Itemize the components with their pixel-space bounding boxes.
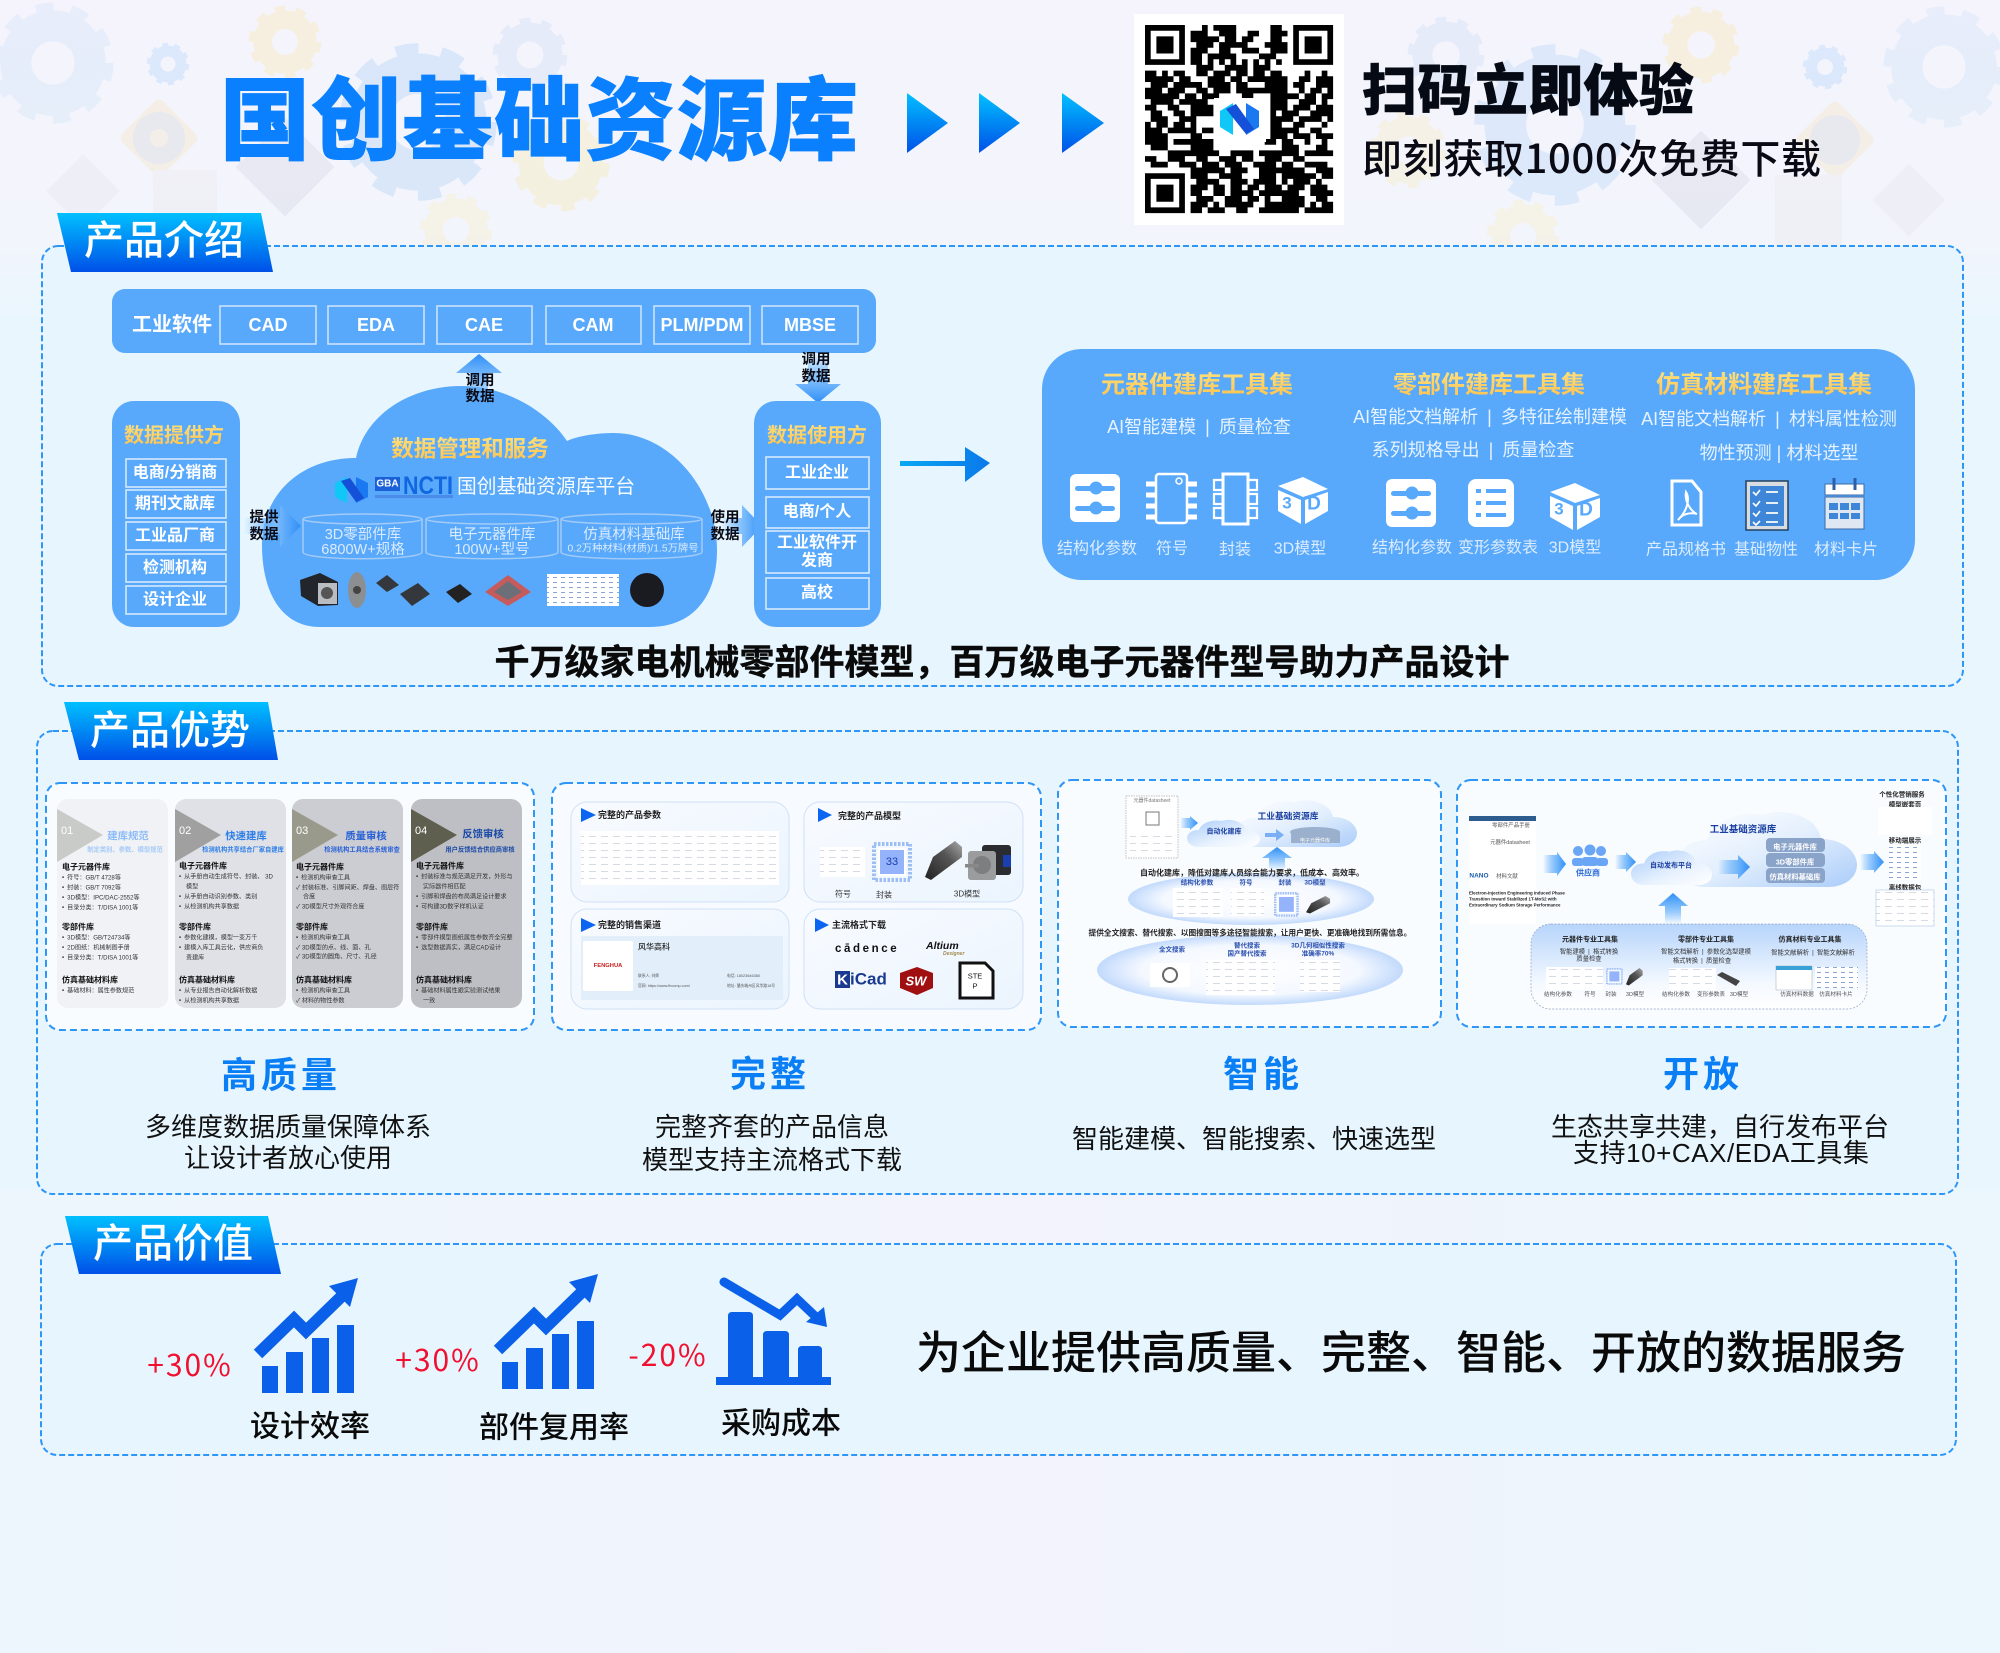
toolkit: parts: 零部件建库工具集 (1393, 372, 1585, 398)
card 02: fast library building: 快速建库 (225, 830, 267, 842)
cloud: data management and services: 数据管理和服务 (391, 436, 549, 462)
card 04: feedback review: 电子元器件库 (416, 860, 464, 870)
label: suppliers: 供应商 (1576, 868, 1600, 878)
source documents (1469, 816, 1565, 924)
cloud: industrial base library (1678, 812, 1857, 887)
source documents: 元器件datasheet (1490, 838, 1530, 846)
arrow: call data down (795, 351, 841, 403)
ellipse: search: 替代搜索 (1234, 940, 1260, 950)
advantage: complete: 模型支持主流格式下载 (642, 1145, 902, 1175)
card 01: library standards: 仿真基础材料库 (62, 974, 118, 984)
icon: structured parameters (1386, 479, 1436, 527)
toolkit: components: 封装 (1219, 540, 1251, 558)
card: mainstream format downloads: STE (968, 972, 982, 980)
value statement: 为企业提供高质量、完整、智能、开放的数据服务 (916, 1328, 1906, 1378)
sub-panel: intelligent diagram (1058, 780, 1441, 1027)
toolkits box: 元器件专业工具集 (1562, 934, 1618, 944)
card: mainstream format downloads: SW (906, 974, 928, 988)
icon: 3D cube: D (1579, 500, 1593, 520)
icon: falling chart (716, 1282, 831, 1385)
card: sales channels: 电话: 18023646380 (727, 973, 760, 978)
cloud: auto publishing platform (1631, 850, 1712, 885)
arrow: call data down: 数据 (802, 367, 830, 385)
card: mainstream format downloads: cādence (835, 943, 899, 955)
card 03: quality review: 零部件库 (296, 922, 328, 932)
panel: product advantages (37, 702, 1958, 1194)
toolkit: parts: 系列规格导出 | 质量检查 (1372, 440, 1574, 460)
icon: variant table (1468, 479, 1514, 527)
card 01: library standards: • 封装：GB/T 7092等 (62, 884, 121, 892)
advantage: complete: 完整 (730, 1054, 810, 1094)
QR sub heading: 即刻获取1000次免费下载 (1362, 127, 1821, 185)
sub-panel: open ecosystem diagram (1457, 780, 1946, 1027)
bar: industrial software: PLM/PDM (660, 315, 744, 335)
panel: product value (41, 1216, 1956, 1455)
arrow: provide data: 数据 (250, 525, 278, 543)
card 02: fast library building: • 从手册自动生成符号、封装、 3D (179, 872, 273, 880)
cloud: automated library building: 自动化建库 (1206, 826, 1242, 836)
toolkit: components: 3D模型 (1274, 540, 1326, 558)
arrow: cloud to outputs (1860, 851, 1884, 873)
toolkit: components: 结构化参数 (1057, 540, 1137, 558)
arrows: title to QR (907, 93, 1104, 153)
cloud: industrial base library (1237, 800, 1357, 847)
bar: industrial software: CAM (572, 315, 614, 335)
icon: PDF spec (1672, 481, 1701, 525)
metric: design efficiency: 设计效率 (250, 1410, 370, 1444)
card 01: library standards (57, 799, 168, 1008)
panel: data users: 发商 (801, 550, 833, 570)
toolkit: simulation materials: 产品规格书 (1646, 540, 1726, 558)
panel: data users: 数据使用方 (767, 423, 867, 447)
toolkits box: 结构化参数 (1662, 990, 1690, 998)
card 01: library standards: • 3D模型：GB/T24734等 (62, 934, 131, 942)
advantage: high quality: 让设计者放心使用 (184, 1143, 392, 1173)
card: product parameters (571, 802, 789, 902)
logo: N mark (335, 477, 368, 503)
toolkit: parts: AI智能文档解析 | 多特征绘制建模 (1353, 407, 1627, 427)
panel: data providers: 期刊文献库 (135, 494, 215, 512)
advantage: complete: 完整齐套的产品信息 (655, 1112, 889, 1142)
sub-panel: completeness cards (552, 783, 1041, 1030)
card 01: library standards: • 目录分类：T/DISA 1001等 (62, 904, 138, 912)
advantage: complete (642, 1054, 902, 1175)
ellipse: search: 全文搜索 (1159, 944, 1186, 954)
panel: data providers: 数据提供方 (124, 423, 224, 447)
card 04: feedback review: • 选型数据真实，满足CAD设计 (416, 944, 501, 952)
bar: industrial software: 工业软件 (132, 313, 212, 336)
heading tab: 产品优势: 产品优势 (90, 709, 250, 753)
card 02: fast library building: • 从手册自动识别参数、类别 (179, 892, 257, 900)
toolkit: simulation materials: 仿真材料建库工具集 (1656, 372, 1872, 398)
source documents: Electron-Injection Engineering Induced Phase (1469, 890, 1565, 896)
advantage: open: 开放 (1663, 1054, 1743, 1094)
metric: purchasing cost (628, 1282, 841, 1440)
panel: data providers: 工业品厂商 (135, 526, 215, 544)
logo: GBA NCTI: NCTI (403, 472, 453, 500)
metric: purchasing cost: 采购成本 (721, 1408, 841, 1440)
icon: 3D cube: D (1307, 494, 1321, 514)
icon: checklist (1746, 481, 1788, 530)
card 01: library standards: 建库规范 (107, 830, 149, 842)
toolkit: components: AI智能建模 | 质量检查 (1107, 417, 1291, 437)
database: parts library (303, 514, 422, 559)
decorative gears and parts, left (0, 9, 604, 262)
icon: N logo (1220, 103, 1259, 135)
toolkits box: 格式转换 | 质量检查 (1673, 956, 1732, 964)
toolkit: components: 符号 (1156, 540, 1188, 558)
advantage: open (1551, 1054, 1889, 1168)
toolkit: parts: 3D模型 (1549, 538, 1601, 556)
icon: 3D cube (1550, 483, 1600, 530)
icon: 3D cube (1278, 477, 1328, 524)
database stack: 仿真材料基础库 (1769, 872, 1821, 882)
source documents: Transition toward Stabilized 1T-MoS2 with (1469, 896, 1557, 902)
card 03: quality review: 检测机构工具结合系统审查 (324, 844, 400, 854)
card: mainstream format downloads: K (837, 972, 848, 988)
title: 国创基础资源库 (220, 72, 858, 172)
card 01: library standards: • 目录分类：T/DISA 1001等 (62, 954, 138, 962)
database: parts library: 3D零部件库 (325, 526, 401, 543)
arrow: to automated library (1180, 816, 1198, 830)
card 03: quality review: 仿真基础材料库 (296, 974, 352, 984)
panel: data providers: 电商/分销商 (133, 464, 217, 482)
card: mainstream format downloads: Designer (943, 951, 965, 957)
card 03: quality review: • 检测机构审查工具 (296, 986, 350, 994)
card 02: fast library building: • 参数化建模，模型一变万千 (179, 934, 257, 942)
advantage: intelligent (1072, 1054, 1436, 1154)
card 01: library standards: 零部件库 (62, 922, 94, 932)
card 03: quality review: 合度 (303, 892, 315, 900)
toolkit: parts: 结构化参数 (1372, 538, 1452, 556)
card 04: feedback review: • 引脚和焊盘的布局满足设计要求 (416, 892, 506, 900)
card 02: fast library building: 模型 (186, 882, 198, 890)
icon: symbol (1146, 474, 1197, 523)
card 04: feedback review (411, 799, 522, 1008)
ellipse: structured data (1128, 873, 1374, 925)
panel: data users (754, 401, 881, 627)
panel: data providers (112, 401, 240, 627)
toolkits box: 零部件专业工具集 (1678, 934, 1734, 944)
card 04: feedback review: 反馈审核 (462, 828, 504, 840)
arrow: docs to supplier (1543, 852, 1566, 876)
panel: data providers: 检测机构 (143, 558, 207, 576)
panel: data providers: 设计企业 (143, 590, 207, 608)
arrow: provide data (244, 505, 301, 547)
toolkit: components: 元器件建库工具集 (1101, 372, 1293, 398)
heading tab: 产品价值 (65, 1216, 281, 1274)
toolkits box: 3D模型 (1730, 990, 1749, 998)
arrow: supplier to platform (1615, 852, 1636, 872)
card 04: feedback review: 用户反馈结合供应商审核 (445, 844, 515, 854)
source documents: 材料文献 (1496, 872, 1518, 880)
datasheet document (1126, 796, 1178, 858)
icon: structured parameters (1070, 474, 1120, 522)
card 02: fast library building: 责建库 (186, 954, 204, 962)
QR heading: 扫码立即体验 (1362, 60, 1694, 122)
arrow: call data up (456, 354, 502, 405)
card: mainstream format downloads: P (972, 982, 978, 990)
logo: GBA NCTI (375, 472, 453, 500)
bar: industrial software (112, 289, 876, 353)
icon: package (1214, 474, 1257, 524)
QR code (1134, 14, 1344, 225)
card 02: fast library building: 仿真基础材料库 (179, 974, 235, 984)
toolkits box: 封装 (1605, 990, 1617, 998)
metric: part reuse rate: 部件复用率 (479, 1412, 629, 1444)
outputs column: 个性化营销服务 (1879, 790, 1925, 798)
card: sales channels: 风华高科 (638, 942, 670, 952)
card 01: library standards: 电子元器件库 (62, 862, 110, 872)
card: sales channels: 联系人: 刘辉 (638, 973, 659, 978)
cloud: data management and services (262, 386, 717, 627)
cloud: auto publishing platform: 自动发布平台 (1650, 860, 1692, 870)
card 01: library standards: • 符号：GB/T 4728等 (62, 874, 121, 882)
toolkit: simulation materials: 材料卡片 (1814, 540, 1878, 558)
database: electronic components library: 电子元器件库 (448, 526, 536, 543)
cloud: industrial base library: 电子元器件库 (1300, 837, 1330, 844)
arrow: use data: 使用 (710, 508, 740, 526)
toolkits box: 变形参数表 (1697, 990, 1725, 998)
ellipse: structured data: 3D模型 (1304, 878, 1326, 886)
icon: 3D cube: 3 (1554, 500, 1564, 518)
arrow: provide data: 提供 (250, 509, 279, 526)
card: product models: 3D模型 (954, 888, 980, 898)
metric: design efficiency (147, 1278, 370, 1444)
card 03: quality review: ✓ 3D模型尺寸外观符合度 (296, 902, 364, 910)
toolkit: simulation materials: AI智能文档解析 | 材料属性检测 (1641, 409, 1897, 429)
heading tab: 产品介绍 (57, 213, 273, 272)
panel: product introduction (42, 213, 1963, 686)
bar: industrial software: CAE (465, 315, 503, 335)
source documents: 零部件产品手册 (1492, 821, 1530, 829)
toolkit: parts: 变形参数表 (1458, 538, 1538, 556)
database: electronic components library: 100W+型号 (454, 541, 530, 558)
ellipse: search: 3D几何相似性搜索 (1291, 940, 1345, 950)
caption: automated library building: 自动化建库，降低对建库人员综合能力要求，低成本、高效率。 (1140, 868, 1364, 878)
card: product models: 封装 (876, 890, 892, 900)
card: sales channels: 地址: 肇庆端州区风华路18号 (727, 983, 775, 988)
outputs column: 移动端展示 (1889, 836, 1922, 844)
database stack (1766, 838, 1825, 883)
card 01: library standards: • 基础材料：属性参数规范 (62, 986, 134, 994)
arrow: toolkits to platform (1658, 893, 1688, 924)
card 04: feedback review: • 基础材料属性跟实验测试结果 (416, 986, 500, 994)
heading tab: 产品价值: 产品价值 (93, 1222, 253, 1266)
card: sales channels: 完整的销售渠道 (598, 919, 661, 930)
card 03: quality review: • 检测机构审查工具 (296, 934, 350, 942)
panel: data users: 工业企业 (785, 462, 849, 482)
database stack: 电子元器件库 (1773, 842, 1817, 852)
toolkit: simulation materials: 基础物性 (1734, 540, 1798, 558)
database: simulation materials library: 仿真材料基础库 (583, 525, 685, 543)
toolkit: components (1057, 372, 1328, 558)
source documents: NANO (1469, 872, 1489, 880)
section caption: 千万级家电机械零部件模型，百万级电子元器件型号助力产品设计 (494, 644, 1510, 682)
card: product models: 33 (886, 856, 898, 868)
card 03: quality review: ✓ 材料的物性参数 (296, 996, 345, 1004)
card: product models: 符号 (835, 888, 851, 898)
cloud: industrial base library: 工业基础资源库 (1258, 810, 1319, 821)
database: simulation materials library (561, 514, 702, 559)
advantage: high quality (145, 1054, 431, 1173)
sub-panel: high quality process cards (46, 783, 534, 1030)
caption: search: 提供全文搜索、替代搜索、以图搜图等多途径智能搜索，让用户更快、更准确地找到所需信息。 (1089, 928, 1411, 938)
card 02: fast library building: • 从检测机构共享数据 (179, 902, 239, 910)
panel: data users: 高校 (801, 582, 833, 602)
card 02: fast library building: 02 (179, 825, 191, 837)
arrow: use data: 数据 (710, 525, 740, 543)
card 04: feedback review: 零部件库 (416, 922, 448, 932)
card 04: feedback review: • 可构建3D数字样机认证 (416, 902, 484, 910)
icon: 3D cube: 3 (1282, 494, 1292, 512)
toolkits box: 符号 (1584, 990, 1596, 998)
card 03: quality review: • 检测机构审查工具 (296, 874, 350, 882)
icon: motor (965, 845, 1011, 880)
card 03: quality review: ✓ 3D模型的圆角、尺寸、孔径 (296, 952, 377, 960)
panel: toolkits (1042, 349, 1915, 580)
card 03: quality review: ✓ 3D模型的点、线、面、孔 (296, 944, 371, 952)
metric: part reuse rate: +30% (395, 1336, 481, 1380)
card 04: feedback review: 一致 (423, 996, 435, 1004)
metric: purchasing cost: -20% (628, 1331, 708, 1375)
database stack: 3D零部件库 (1776, 858, 1814, 866)
card 02: fast library building (175, 799, 286, 1008)
panel: data users: 电商/个人 (783, 502, 851, 520)
card 04: feedback review: 实际器件相匹配 (423, 882, 466, 890)
arrow: into database (1265, 829, 1284, 841)
advantage: open: 生态共享共建，自行发布平台 (1551, 1112, 1889, 1142)
card: mainstream format downloads: 主流格式下载 (832, 919, 886, 930)
card: mainstream format downloads (804, 909, 1023, 1009)
arrow: platform to database (1718, 855, 1750, 879)
toolkit: simulation materials: 物性预测 | 材料选型 (1700, 443, 1858, 463)
heading tab: 产品优势 (64, 702, 278, 760)
toolkits box: 3D模型 (1626, 990, 1645, 998)
card: sales channels (571, 909, 789, 1009)
card 04: feedback review: 仿真基础材料库 (416, 974, 472, 984)
logo: GBA NCTI: GBA (376, 478, 399, 490)
arrow: call data up: 数据 (466, 387, 494, 405)
card 02: fast library building: 电子元器件库 (179, 860, 227, 870)
toolkits box: 质量检查 (1576, 954, 1602, 962)
arrow: call data up: 调用 (466, 372, 494, 389)
toolkits box: 仿真材料数据 (1780, 990, 1814, 998)
toolkit: simulation materials (1641, 372, 1897, 558)
metric: design efficiency: +30% (147, 1341, 233, 1385)
icon: rising chart (498, 1274, 598, 1389)
advantage: high quality: 多维度数据质量保障体系 (145, 1112, 431, 1142)
panel: data users: 工业软件开 (777, 534, 857, 552)
ellipse: search: 国产替代搜索 (1228, 948, 1267, 958)
card 02: fast library building: • 从检测机构共享数据 (179, 996, 239, 1004)
toolkits box: 智能建模 | 格式转换 (1560, 946, 1619, 956)
advantage: high quality: 高质量 (221, 1054, 341, 1096)
images: parts and components (300, 572, 664, 608)
card: mainstream format downloads: Altium (925, 940, 959, 952)
outputs column: 离线数据包 (1889, 882, 1922, 892)
toolkit: parts (1353, 372, 1627, 556)
card: sales channels: 官网: https://www.fhcomp.com/ (638, 983, 691, 988)
cloud: industrial base library: 工业基础资源库 (1710, 824, 1777, 836)
toolkits box: 智能文档解析 | 参数化选型建模 (1661, 946, 1752, 956)
outputs column (1876, 790, 1934, 926)
card 03: quality review: 03 (296, 825, 308, 837)
cloud: data management and services: 国创基础资源库平台 (457, 476, 635, 498)
heading tab: 产品介绍: 产品介绍 (84, 219, 244, 263)
card: product models: 完整的产品模型 (838, 810, 901, 821)
card 03: quality review: ✓ 封装标准、引脚间距、焊盘、图层符 (296, 884, 399, 892)
card 02: fast library building: • 建模入库工具云化，供应商负 (179, 944, 263, 952)
card 02: fast library building: 零部件库 (179, 922, 211, 932)
toolkits box: 仿真材料卡片 (1819, 990, 1853, 998)
source documents: Extraordinary Sodium Storage Performance (1469, 902, 1561, 908)
ellipse: structured data: 封装 (1278, 878, 1292, 886)
toolkits box: 仿真材料专业工具集 (1778, 934, 1842, 944)
decorative gears and parts, right (1374, 11, 1998, 268)
metric: part reuse rate (395, 1274, 629, 1444)
icon: calendar (1825, 478, 1864, 529)
arrow: call data down: 调用 (802, 351, 830, 368)
database: electronic components library (426, 514, 558, 559)
ellipse: search (1097, 935, 1403, 1005)
card 03: quality review (292, 799, 403, 1008)
ellipse: structured data: 结构化参数 (1181, 878, 1214, 886)
advantage: open: 支持10+CAX/EDA工具集 (1573, 1138, 1869, 1168)
advantage: intelligent: 智能 (1223, 1054, 1303, 1094)
card 01: library standards: 制定类别、参数、模型规范 (87, 844, 163, 854)
ellipse: search: 准确率70% (1302, 948, 1334, 958)
icon: rising chart (258, 1278, 358, 1393)
card: sales channels: FENGHUA (594, 963, 623, 969)
card: product parameters: 完整的产品参数 (598, 809, 661, 820)
toolkits box: 智能文献解析 | 智能文献解析 (1771, 948, 1855, 956)
datasheet document: 元器件datasheet (1134, 797, 1171, 804)
arrow: use data (710, 505, 762, 547)
card 01: library standards: 01 (61, 825, 73, 837)
card: product models (804, 802, 1023, 902)
card 01: library standards: • 3D模型：IPC/DAC-2552等 (62, 894, 140, 902)
ellipse: structured data: 符号 (1240, 878, 1253, 886)
card 01: library standards: • 2D图纸：机械制图手册 (62, 944, 130, 952)
icon: suppliers (1572, 844, 1608, 866)
card 04: feedback review: 04 (415, 825, 427, 837)
toolkits box: 结构化参数 (1544, 990, 1572, 998)
bar: industrial software: CAD (248, 315, 288, 335)
bar: industrial software: EDA (357, 315, 395, 335)
card 04: feedback review: • 封装标准与规范满足开发，外形与 (416, 872, 513, 880)
card 03: quality review: 质量审核 (345, 830, 387, 842)
card 02: fast library building: • 从专业报告自动化解析数据 (179, 986, 257, 994)
database: simulation materials library: 0.2万种材料(材质)/1.5万牌号 (567, 542, 699, 554)
card 04: feedback review: • 零部件模型图纸属性参数齐全完整 (416, 934, 513, 942)
cloud: automated library building (1187, 820, 1260, 847)
card 03: quality review: 电子元器件库 (296, 862, 344, 872)
database: parts library: 6800W+规格 (321, 541, 405, 558)
bar: industrial software: MBSE (784, 315, 836, 335)
advantage: intelligent: 智能建模、智能搜索、快速选型 (1072, 1124, 1436, 1154)
card: mainstream format downloads: iCad (850, 970, 887, 988)
toolkits box (1531, 924, 1867, 1009)
outputs column: 模型嵌套页 (1889, 800, 1922, 808)
arrow: up into cloud (1262, 847, 1292, 870)
arrow: to toolkits (900, 447, 990, 482)
card 02: fast library building: 检测机构共享结合厂家自建库 (202, 844, 285, 854)
